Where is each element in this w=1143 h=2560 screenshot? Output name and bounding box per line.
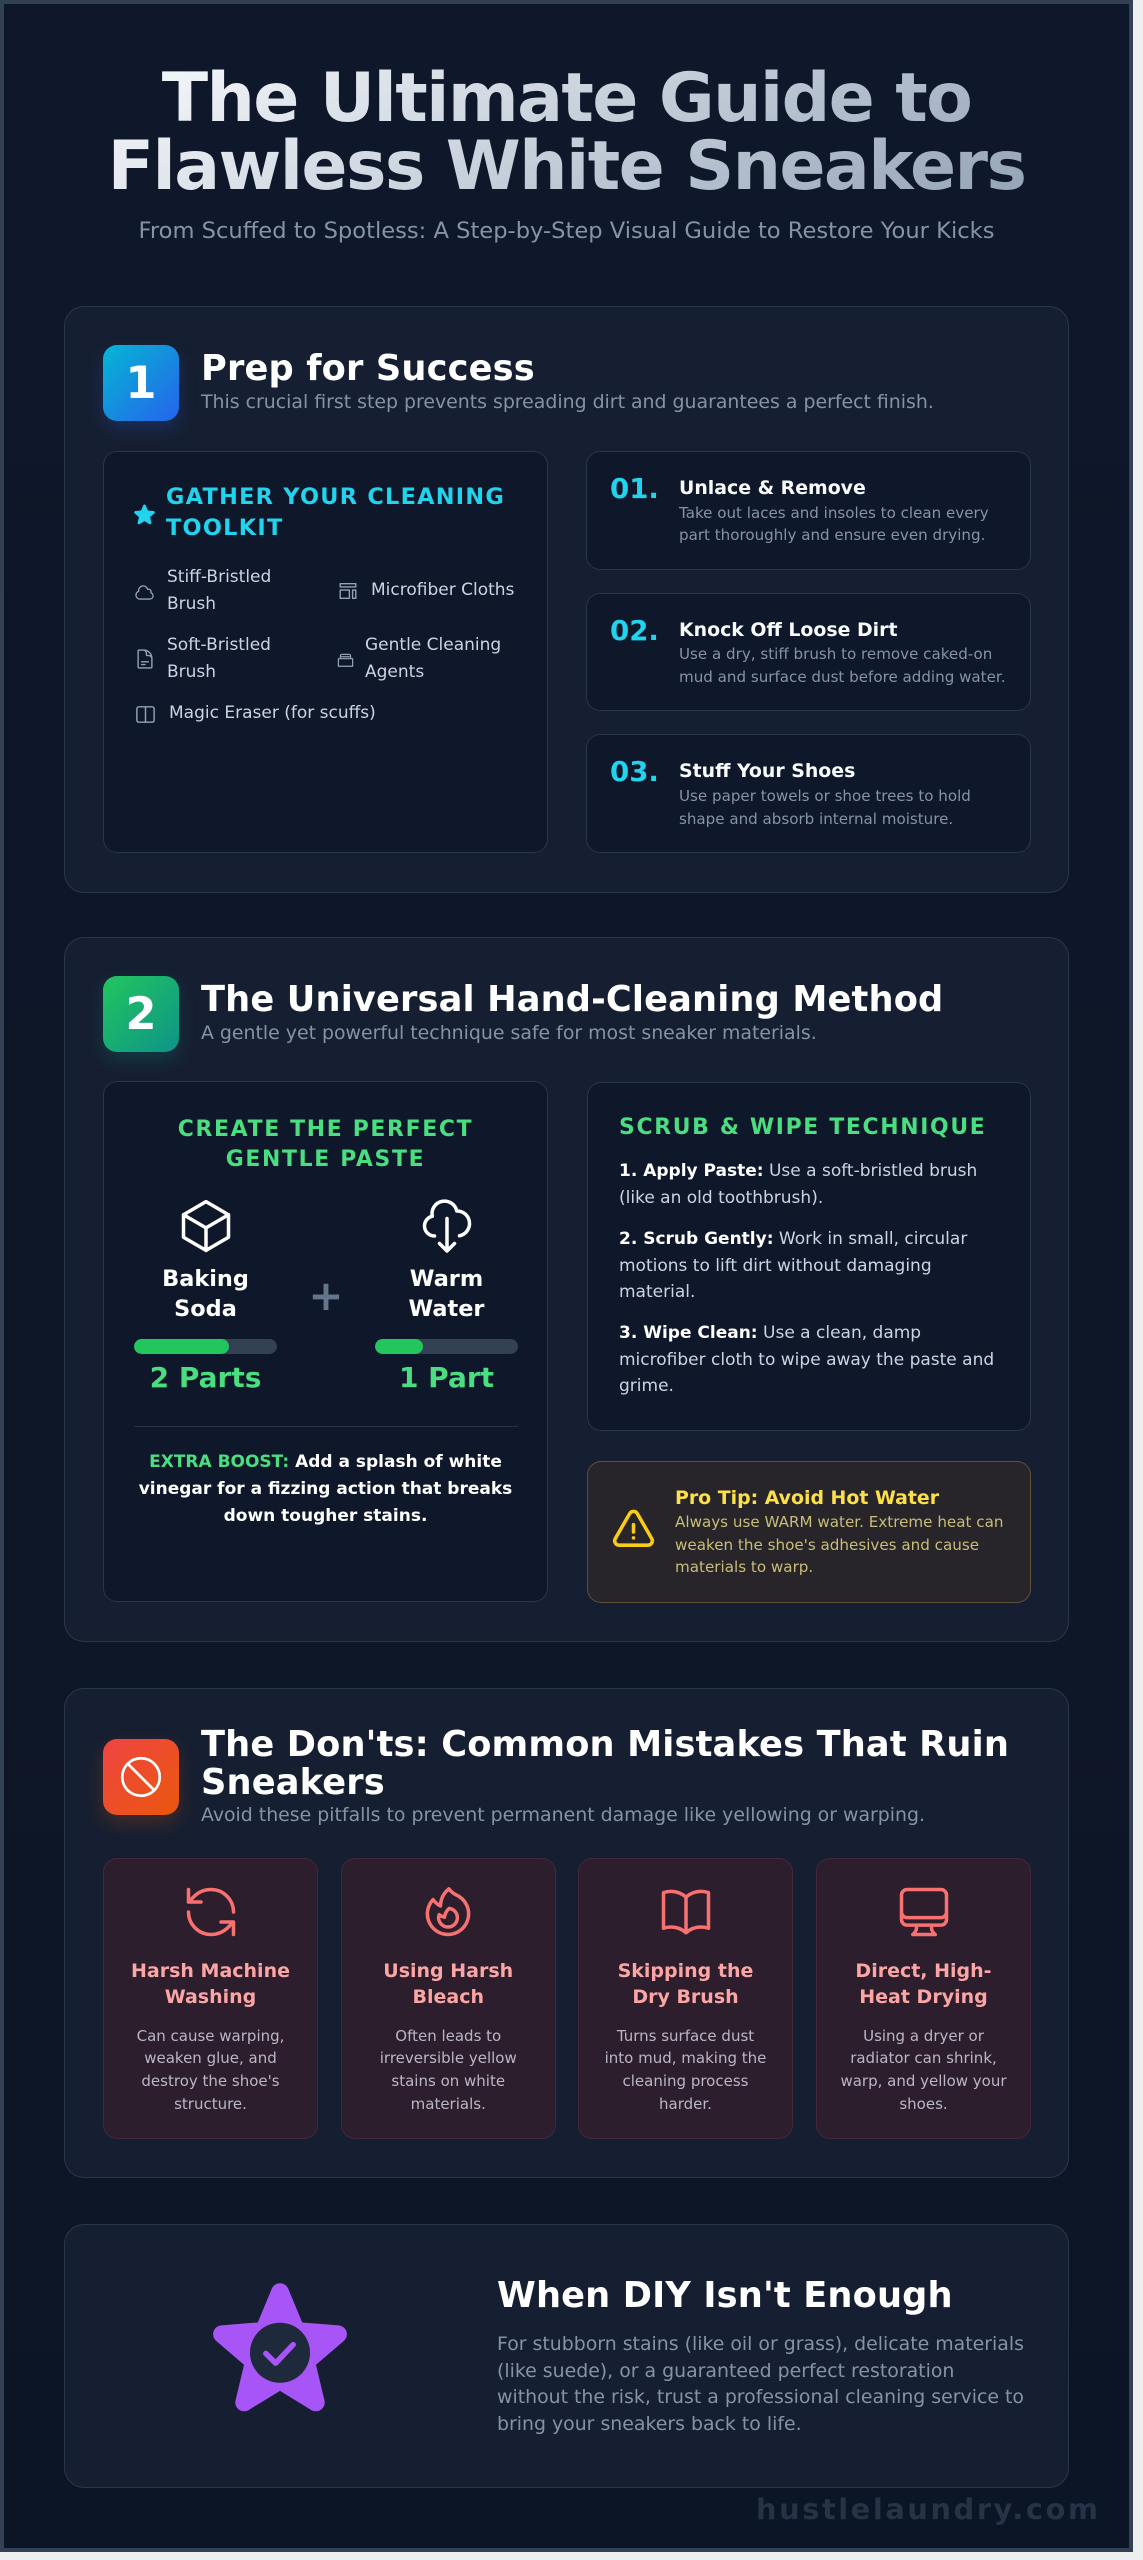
step number: 01. [610, 472, 659, 505]
card title: Skipping the [618, 1960, 753, 1982]
step: wipe clean: grime. [619, 1376, 674, 1396]
card title: Harsh Machine [131, 1960, 290, 1982]
bar: 1 part [375, 1339, 518, 1354]
callout: extra boost: EXTRA BOOST: Add a splash of white [149, 1452, 502, 1472]
card text: shoes. [899, 2095, 948, 2113]
card text: materials. [411, 2095, 486, 2113]
icon: cloud download [422, 1199, 472, 1253]
title [108, 59, 1025, 206]
card text: into mud, making the [605, 2049, 766, 2067]
panel: the don'ts [64, 1688, 1069, 2178]
card text: radiator can shrink, [850, 2049, 997, 2067]
icon: number 2 badge: 2 [125, 987, 157, 1040]
panel: cleaning toolkit [103, 451, 548, 853]
heading: create the perfect gentle paste [178, 1117, 473, 1172]
step: scrub gently [619, 1229, 968, 1302]
heading: scrub and wipe technique: SCRUB & WIPE TECHNIQUE [619, 1115, 986, 1140]
card: machine washing [103, 1858, 318, 2139]
step: scrub gently: material. [619, 1282, 695, 1302]
heading: gather your cleaning toolkit: TOOLKIT [166, 514, 284, 540]
icon: warning triangle [612, 1510, 654, 1547]
icon: flame [426, 1887, 470, 1936]
tip title: Pro Tip: Avoid Hot Water [675, 1487, 939, 1509]
heading: don'ts: Sneakers [201, 1762, 385, 1803]
card: harsh bleach [341, 1858, 556, 2139]
step description: part thoroughly and ensure even drying. [679, 526, 985, 544]
item: gentle cleaning agents [365, 635, 501, 682]
tip text: weaken the shoe's adhesives and cause [675, 1536, 979, 1554]
section description: Avoid these pitfalls to prevent permanent damage like yellowing or warping. [201, 1804, 925, 1826]
step: wipe clean [619, 1323, 994, 1396]
card title [855, 1960, 992, 2008]
card text [380, 2027, 517, 2113]
icon: archive [338, 654, 354, 667]
step: apply paste: 1. Apply Paste: Use a soft-bristled brush [619, 1161, 977, 1181]
card title: Washing [165, 1986, 256, 2008]
card text: warp, and yellow your [840, 2072, 1007, 2090]
panel: scrub and wipe technique [586, 1082, 1031, 1431]
heading: when DIY isn't enough: When DIY Isn't Enough [497, 2275, 953, 2316]
label: 2 parts: 2 Parts [150, 1361, 261, 1394]
item: magic eraser: Magic Eraser (for scuffs) [169, 703, 376, 723]
step description [679, 645, 1006, 686]
section description: This crucial first step prevents spreading dirt and guarantees a perfect finish. [201, 391, 934, 413]
step number: 02. [610, 614, 659, 647]
card text [137, 2027, 284, 2113]
step: scrub gently: 2. Scrub Gently: Work in small, circular [619, 1229, 967, 1249]
step description: Use paper towels or shoe trees to hold [679, 787, 971, 805]
callout: extra boost: vinegar for a fizzing action that breaks [139, 1479, 512, 1499]
icon: template [340, 583, 356, 599]
title: Flawless White Sneakers [108, 127, 1025, 206]
panel: when DIY isn't enough [64, 2224, 1069, 2488]
card text: harder. [659, 2095, 712, 2113]
closing text: For stubborn stains (like oil or grass), delicate materials [497, 2333, 1024, 2355]
step description: Use a dry, stiff brush to remove caked-on [679, 645, 992, 663]
card text: structure. [174, 2095, 247, 2113]
panel: step 01 [586, 451, 1031, 570]
item: soft-bristled brush: Brush [167, 662, 216, 682]
card title: Heat Drying [859, 1986, 988, 2008]
ingredient: warm water [409, 1266, 484, 1322]
heading: create the perfect gentle paste: CREATE THE PERFECT [178, 1117, 473, 1142]
heading: create the perfect gentle paste: GENTLE PASTE [226, 1147, 425, 1172]
step description: mud and surface dust before adding water. [679, 668, 1006, 686]
card text: cleaning process [623, 2072, 748, 2090]
ingredient: baking soda: Soda [174, 1296, 237, 1322]
closing text: without the risk, trust a professional cleaning service to [497, 2386, 1024, 2408]
tip text [675, 1513, 1003, 1576]
step: scrub gently: motions to lift dirt without damaging [619, 1256, 932, 1276]
step description [678, 504, 989, 544]
card text: Can cause warping, [137, 2027, 284, 2045]
card text [840, 2027, 1007, 2113]
card title: Using Harsh [383, 1960, 513, 1982]
label: 1 part: 1 Part [399, 1361, 494, 1394]
closing text: bring your sneakers back to life. [497, 2413, 802, 2435]
step: apply paste: (like an old toothbrush). [619, 1188, 823, 1208]
callout: extra boost: down tougher stains. [224, 1506, 427, 1526]
card text: Turns surface dust [617, 2027, 754, 2045]
card: high-heat drying [816, 1858, 1031, 2139]
icon: purple star badge [213, 2283, 347, 2412]
card text: Often leads to [395, 2027, 501, 2045]
icon: refresh [186, 1888, 236, 1936]
icon: columns [136, 706, 155, 723]
panel: gentle paste recipe [103, 1081, 548, 1602]
panel: step 1 prep for success [64, 306, 1069, 893]
closing text: (like suede), or a guaranteed perfect restoration [497, 2360, 954, 2382]
panel: step 03 [586, 734, 1031, 853]
step description [679, 787, 971, 828]
watermark: hustlelaundry.com [756, 2492, 1101, 2526]
icon: number 1 badge: 1 [125, 356, 157, 409]
card text: destroy the shoe's [141, 2072, 280, 2090]
item: stiff-bristled brush [167, 567, 271, 614]
heading: don'ts: The Don'ts: Common Mistakes That Ruin [201, 1724, 1009, 1764]
icon: cube [182, 1200, 230, 1252]
card title [618, 1960, 753, 2008]
tip text: materials to warp. [675, 1558, 813, 1576]
ingredient: warm water: Water [409, 1296, 484, 1322]
heading: gather your cleaning toolkit [166, 484, 505, 540]
subtitle: From Scuffed to Spotless: A Step-by-Step Visual Guide to Restore Your Kicks [138, 218, 995, 244]
step: apply paste [619, 1161, 977, 1208]
icon: open book [662, 1890, 710, 1935]
icon: number 2 badge [103, 976, 179, 1052]
title: The Ultimate Guide to [162, 59, 971, 138]
card title [383, 1960, 513, 2008]
item: soft-bristled brush [167, 635, 271, 682]
item: soft-bristled brush: Soft-Bristled [167, 635, 271, 655]
panel: step 2 universal hand-cleaning method [64, 937, 1069, 1642]
card title: Dry Brush [632, 1986, 739, 2008]
card text: weaken glue, and [144, 2049, 277, 2067]
step title: Unlace & Remove [679, 477, 866, 499]
card text: Using a dryer or [863, 2027, 984, 2045]
item: microfiber cloths: Microfiber Cloths [371, 580, 514, 600]
card title [131, 1960, 290, 2008]
icon: cloud [135, 585, 154, 600]
icon: number 1 badge [103, 345, 179, 421]
step description: Take out laces and insoles to clean every [679, 504, 989, 522]
step title: Stuff Your Shoes [679, 760, 855, 782]
icon: ban badge [103, 1739, 179, 1815]
heading: don'ts [201, 1724, 1009, 1803]
icon: document [137, 649, 153, 669]
tip text: Always use WARM water. Extreme heat can [675, 1513, 1003, 1531]
step description: shape and absorb internal moisture. [679, 810, 953, 828]
icon: plus: + [308, 1271, 344, 1320]
closing text [497, 2333, 1024, 2435]
step title: Knock Off Loose Dirt [679, 619, 897, 641]
item: gentle cleaning agents: Agents [365, 662, 424, 682]
heading: universal hand-cleaning method: The Universal Hand-Cleaning Method [201, 979, 943, 1020]
icon: toolkit star [134, 504, 155, 524]
section description: A gentle yet powerful technique safe for most sneaker materials. [201, 1022, 817, 1044]
ingredient: baking soda: Baking [162, 1266, 249, 1292]
step: wipe clean: 3. Wipe Clean: Use a clean, damp [619, 1323, 921, 1343]
callout: extra boost [139, 1452, 512, 1526]
card text: stains on white [391, 2072, 505, 2090]
card text [605, 2027, 766, 2113]
bar: 2 parts [134, 1339, 277, 1354]
item: gentle cleaning agents: Gentle Cleaning [365, 635, 501, 655]
ingredient: warm water: Warm [410, 1266, 483, 1292]
ingredient: baking soda [162, 1266, 249, 1322]
item: stiff-bristled brush: Stiff-Bristled [167, 567, 271, 587]
item: stiff-bristled brush: Brush [167, 594, 216, 614]
step: wipe clean: microfiber cloth to wipe away the paste and [619, 1350, 994, 1370]
card text: irreversible yellow [380, 2049, 517, 2067]
panel: step 02 [586, 593, 1031, 711]
callout: pro tip [586, 1461, 1031, 1603]
card title: Bleach [412, 1986, 484, 2008]
heading: prep for success: Prep for Success [201, 348, 535, 389]
card title: Direct, High- [855, 1960, 992, 1982]
card: skipping dry brush [578, 1858, 793, 2139]
heading: gather your cleaning toolkit: GATHER YOUR CLEANING [166, 484, 505, 510]
icon: monitor [900, 1888, 948, 1936]
step number: 03. [610, 755, 659, 788]
